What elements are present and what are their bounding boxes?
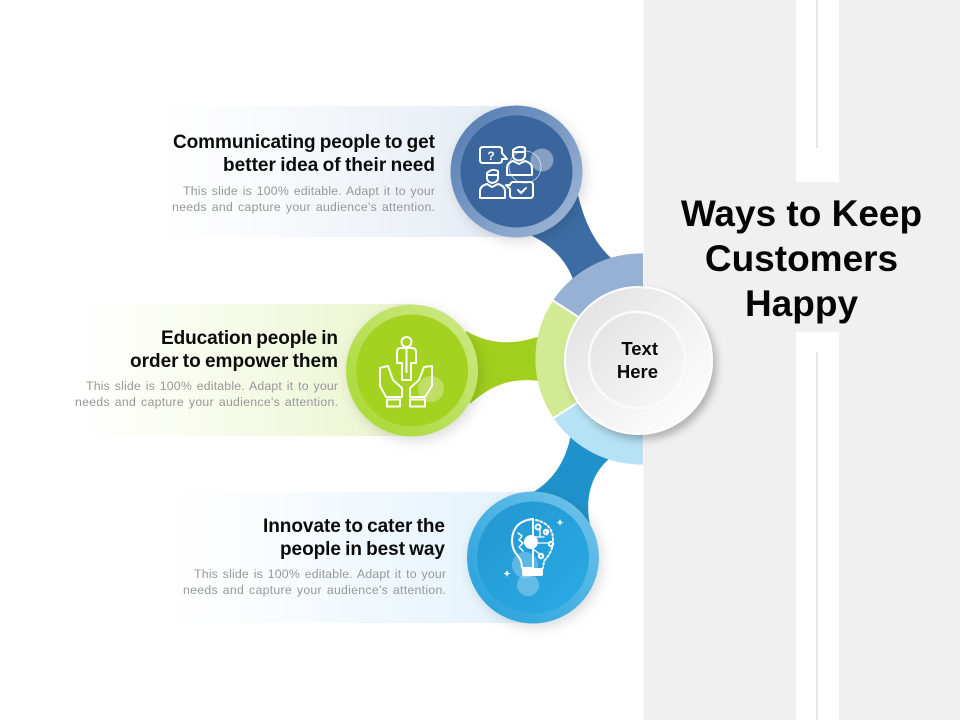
text block: communicating: This slide is 100% editable. Adapt it to your [183,184,435,198]
node: communicating [450,106,582,238]
text block: communicating: needs and capture your audience's attention. [172,200,435,214]
text band: education [80,304,412,436]
icon glyph: question mark: ? [487,149,495,163]
ring segment: light blue [554,390,643,465]
text band: innovate [170,492,533,623]
title [681,193,922,324]
text block: innovate [183,516,446,597]
text block: education: Education people in [161,328,338,349]
center ring segments [535,253,643,465]
connector: blue stem [530,195,612,282]
node: innovate [467,492,599,624]
text block: innovate: This slide is 100% editable. Adapt it to your [194,567,446,581]
icon: people talking [480,147,533,198]
text block: communicating [172,132,436,214]
title: Ways to Keep [681,193,922,234]
text band: communicating [160,106,517,237]
center text: Text [621,338,658,359]
decorative white strip, lower [796,332,839,720]
title: Customers [705,238,898,279]
ring segment: green [535,300,600,418]
text block: innovate: people in best way [280,539,445,560]
center text: Here [617,361,658,382]
icon: light bulb with circuit [512,519,553,568]
text block: education [75,328,338,409]
text block: education: order to empower them [130,351,338,372]
title: Happy [745,283,858,324]
text block: education: needs and capture your audience's attention. [75,395,338,409]
text block: communicating: Communicating people to get [173,132,436,153]
connector: light blue stem [530,434,610,525]
node: education [346,304,478,436]
icon: hands holding person [380,337,432,406]
center disc [565,287,712,434]
text block: education: This slide is 100% editable. Adapt it to your [86,379,338,393]
center text [617,338,658,382]
decorative white strip, upper [796,0,839,182]
text block: innovate: needs and capture your audience's attention. [183,583,446,597]
background panel [644,0,960,720]
connector: green stem [466,331,540,404]
ring segment: blue [553,253,643,332]
text block: innovate: Innovate to cater the [263,516,445,537]
icon detail: bulb hub and base [522,535,543,576]
text block: communicating: better idea of their need [223,155,435,176]
icon detail: sparkles [504,519,564,577]
